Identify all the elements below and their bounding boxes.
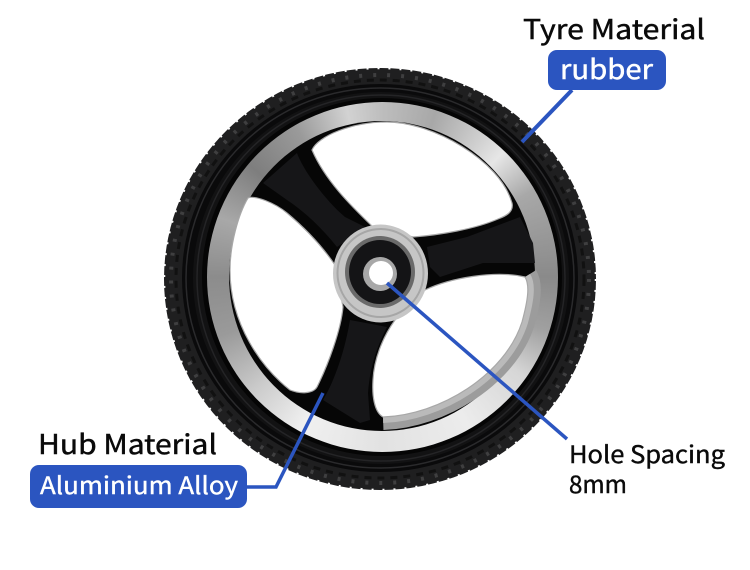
label: hole spacing: Hole Spacing	[569, 435, 725, 470]
black hub spokes	[229, 121, 535, 431]
spoke windows	[230, 122, 528, 417]
inner rim lip	[383, 277, 528, 417]
label pill: rubber: rubber	[560, 48, 654, 87]
label pill: aluminium alloy: Aluminium Alloy	[40, 466, 239, 501]
leader line: hub material	[247, 393, 323, 487]
label: hole spacing	[569, 435, 725, 500]
label: hole spacing: 8mm	[569, 465, 627, 500]
aluminium rim	[207, 102, 558, 452]
centre hub and bearing	[333, 224, 428, 322]
label pill: rubber	[548, 48, 666, 90]
heading: tyre material: Tyre Material	[523, 8, 705, 47]
spoke panels	[263, 153, 535, 423]
label pill: aluminium alloy	[30, 465, 247, 508]
leader line: tyre material	[522, 90, 572, 142]
heading: hub material: Hub Material	[38, 423, 217, 462]
leader line: hole spacing	[387, 283, 567, 439]
